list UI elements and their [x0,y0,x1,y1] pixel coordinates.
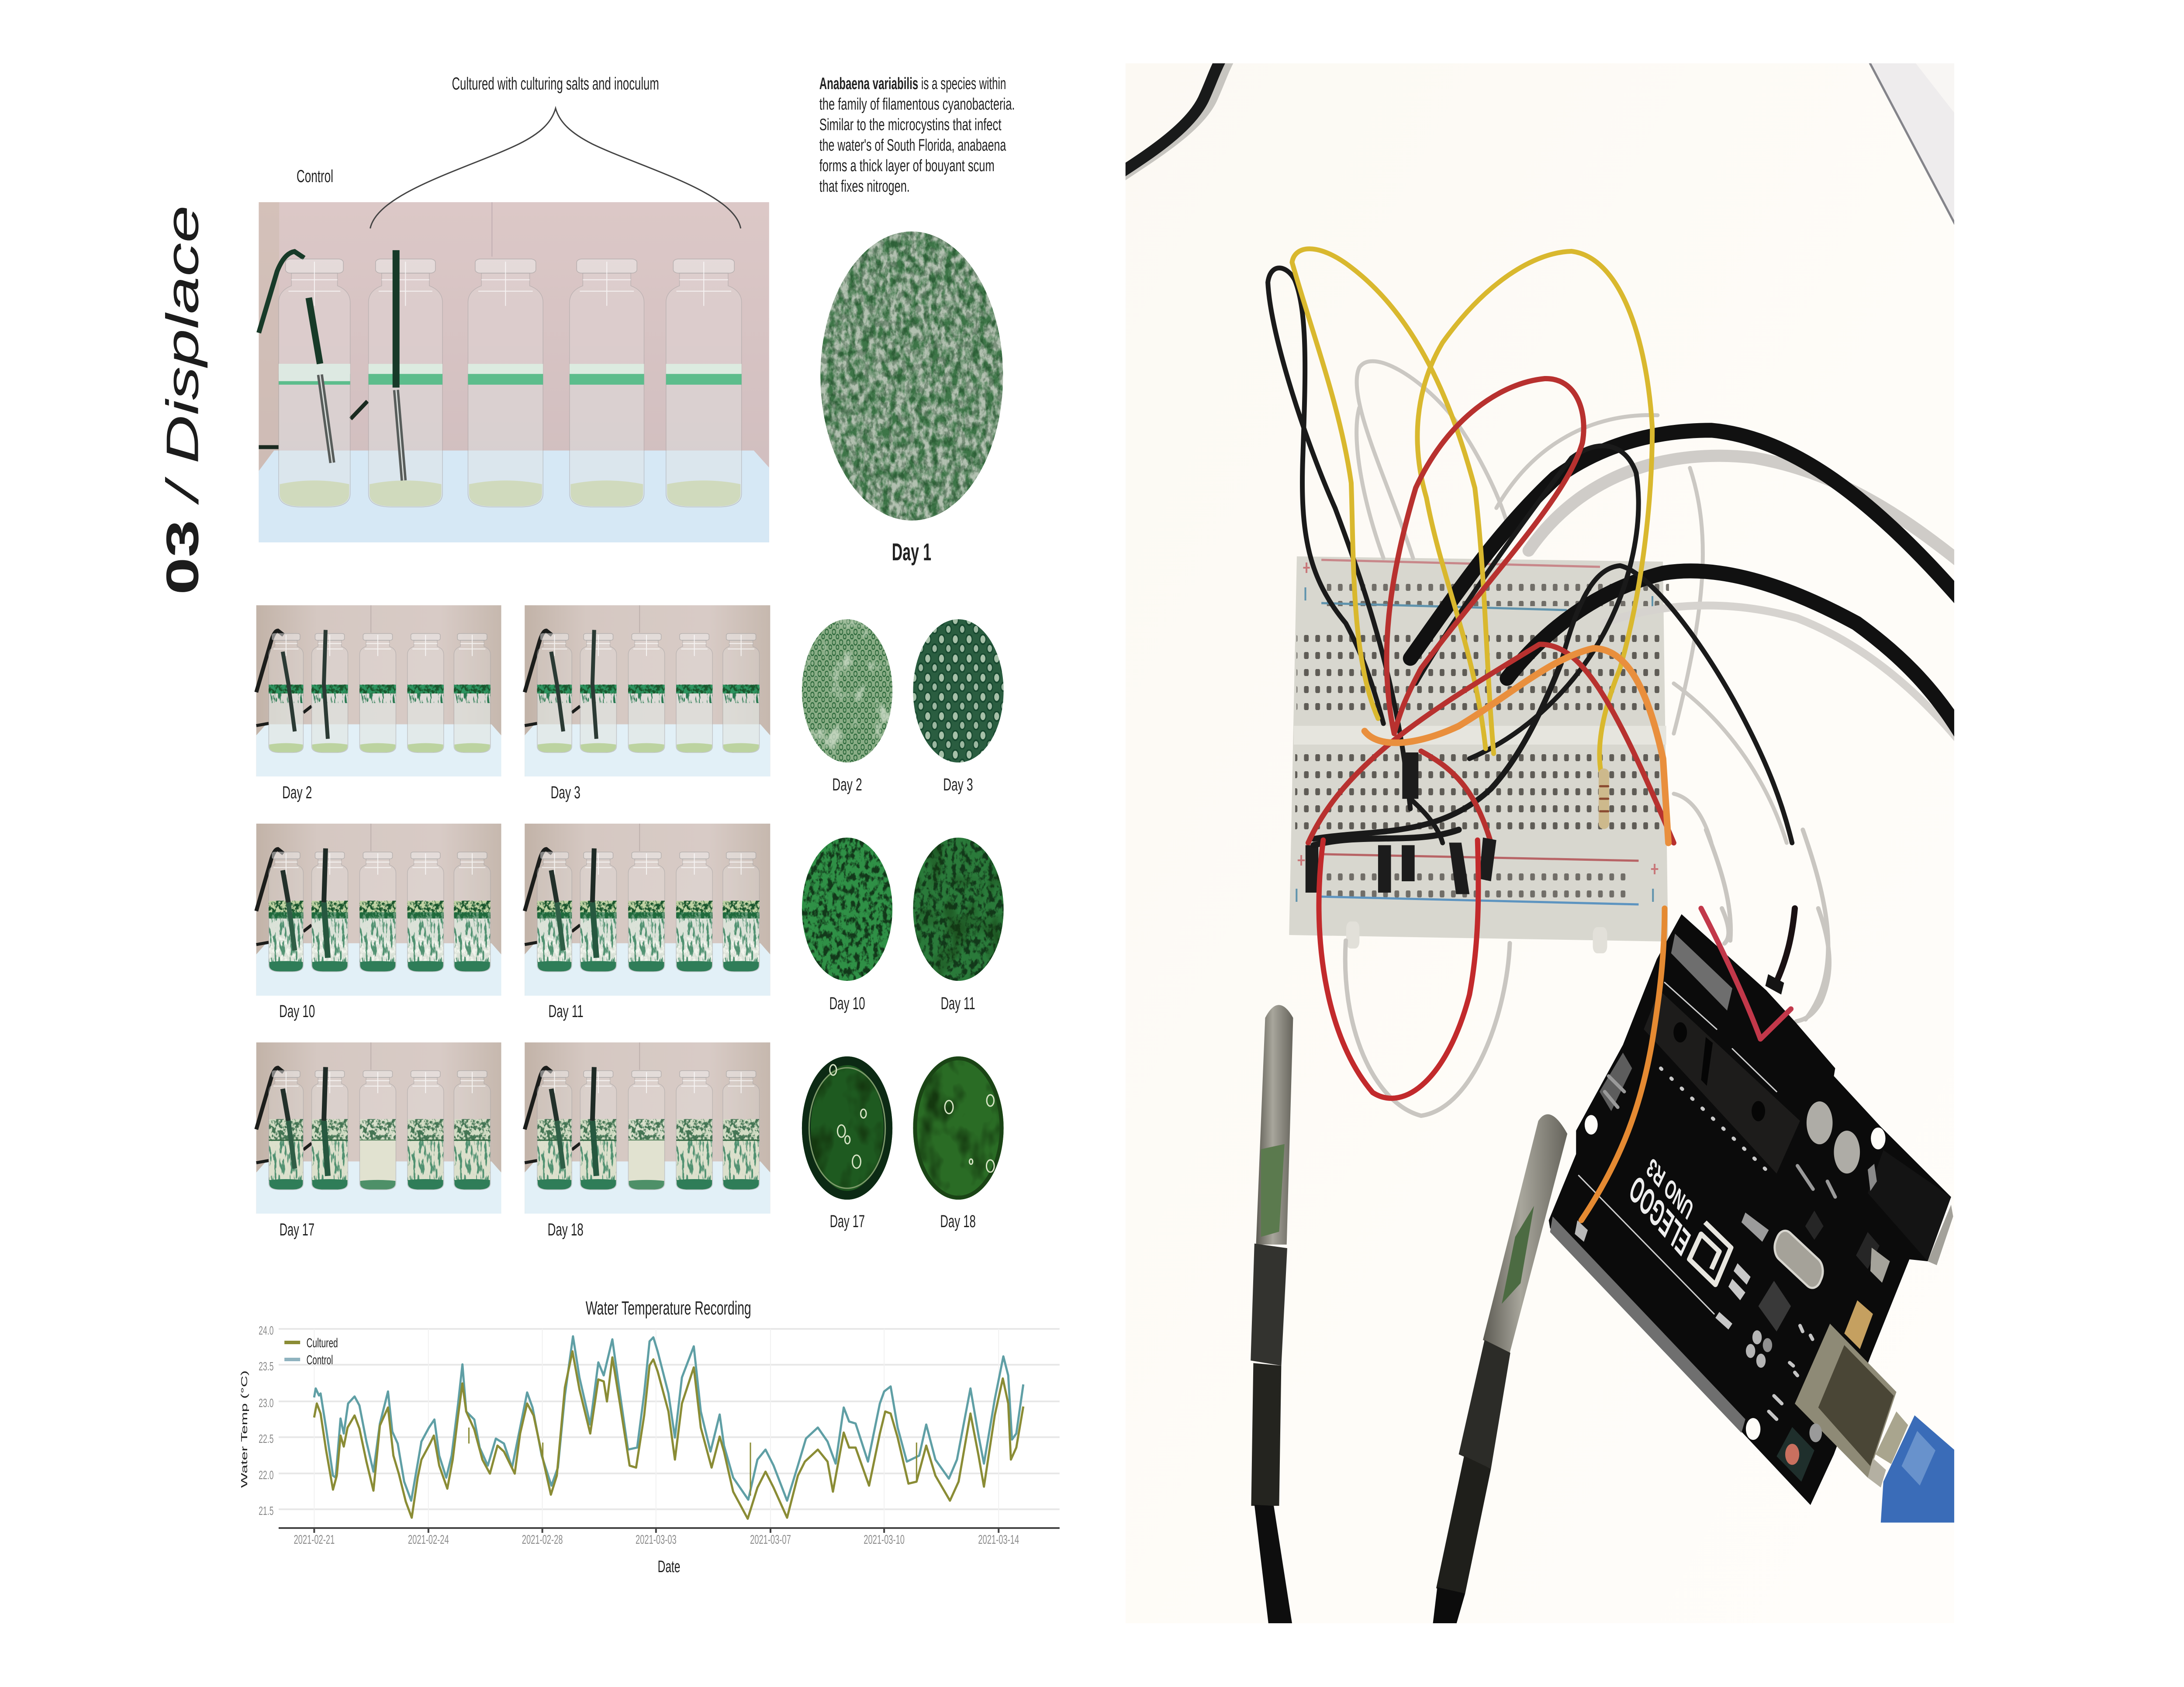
legend [284,1336,338,1367]
wire: black to board [1775,908,1795,984]
arduino logo mark [1690,1222,1731,1285]
y axis tick labels: 23.5 [259,1359,273,1373]
dish labels: Day 10 [829,994,865,1014]
petri dish: day 17 [802,1056,893,1201]
dish labels: Day 11 [941,994,975,1014]
petri dish: day 10 [802,837,893,982]
x axis title: Date [658,1557,680,1576]
x axis tick labels: 2021-03-07 [750,1533,791,1547]
arduino board text [1624,1152,1697,1264]
y axis tick labels: 22.5 [259,1432,273,1446]
cable: sensor one [1410,430,1964,659]
wire: red loop [1319,840,1478,1098]
dish labels: Day 17 [830,1212,865,1232]
sensor probe: right [1433,1114,1567,1623]
wires: yellow [1292,249,1652,774]
wire: orange to board [1581,908,1665,1220]
wire shadows lower [1345,830,1828,1116]
dish labels: Day 2 [832,775,862,795]
arduino board text: ELEGOO [1624,1167,1695,1264]
photo: five jars day 1 [259,202,769,542]
photo labels: Day 3 [551,783,581,803]
wires: red [1308,379,1674,843]
wires: black [1268,268,1792,843]
wire shadows [1357,361,1787,843]
y axis tick labels: 24.0 [259,1324,273,1337]
label: control jar: Control [297,167,333,186]
petri dish: day 2 [802,618,893,763]
page canvas [165,63,1954,1623]
photo labels: Day 18 [548,1220,584,1240]
photo labels: Day 17 [280,1220,314,1240]
wire: grey header pin [1575,1220,1588,1242]
photo labels: Day 10 [279,1002,315,1021]
text block: Anabaena description: Anabaena variabilis is a species within [819,74,1006,93]
USB connector [1795,1324,1955,1522]
cable: top left [1120,57,1230,177]
line chart: water temperature recording [239,1297,1060,1576]
photo labels: Day 11 [549,1002,584,1021]
x axis tick labels: 2021-03-10 [864,1533,905,1547]
y axis tick labels: 22.0 [259,1468,273,1482]
y axis tick labels: 21.5 [259,1504,273,1518]
data series: control and cultured [314,1336,1023,1519]
chart title: Water Temperature Recording [586,1297,751,1319]
reset button [1776,1424,1822,1482]
wire: red to board [1701,908,1791,1039]
x axis tick labels: 2021-03-03 [636,1533,677,1547]
label: day 1: Day 1 [892,538,931,566]
jumper connectors [1306,752,1496,894]
photo: day 10 [256,824,501,996]
text block: Anabaena description: that fixes nitrogen. [819,176,910,195]
arduino board text: UNO R3 [1643,1152,1697,1225]
petri dish: day 18 [912,1056,1004,1201]
y axis tick labels [259,1324,273,1518]
x axis tick labels: 2021-02-28 [522,1533,563,1547]
cable: sensor two [1507,571,1964,738]
sensor probe: left [1251,1005,1293,1623]
photo: day 3 [525,605,770,776]
photo: day 2 [256,605,501,776]
y axis tick labels: 23.0 [259,1396,273,1410]
petri dish: day 1 [819,229,1004,523]
x axis tick labels: 2021-02-24 [408,1533,449,1547]
wire: orange [1365,649,1669,843]
arduino board [1549,908,1955,1522]
photo: day 18 [525,1042,770,1214]
breadboard [1289,556,1669,953]
text block: Anabaena description: forms a thick layer of bouyant scum [819,156,995,175]
photo: day 11 [525,824,770,996]
y axis title: Water Temp (°C) [239,1370,249,1488]
text block: Anabaena description: the family of filamentous cyanobacteria. [819,94,1015,113]
petri dish: day 3 [912,618,1004,763]
x axis tick labels [294,1533,1019,1547]
text block: Anabaena description [819,74,1015,195]
x axis tick labels: 2021-02-21 [294,1533,335,1547]
photo: arduino circuit with temperature probes [1120,57,1964,1623]
label: cultured jars: Cultured with culturing salts and inoculum [452,74,659,94]
dish labels [829,775,976,1232]
x axis tick labels: 2021-03-14 [978,1533,1019,1547]
photo: day 17 [256,1042,501,1214]
legend: Control [307,1353,333,1367]
photo labels: Day 2 [282,783,312,803]
legend: Cultured [307,1336,338,1350]
text block: Anabaena description: Similar to the microcystins that infect [819,115,1002,134]
photo labels [279,783,584,1240]
corner: grey box at top right [1870,63,1961,235]
petri dish: day 11 [912,837,1004,982]
bracket over cultured jars [370,108,741,228]
dish labels: Day 3 [943,775,973,795]
text block: Anabaena description: the water's of South Florida, anabaena [819,135,1006,154]
resistor [1600,774,1608,824]
title: 03 / Displace: 03 / Displace [157,205,208,595]
dish labels: Day 18 [940,1212,976,1232]
